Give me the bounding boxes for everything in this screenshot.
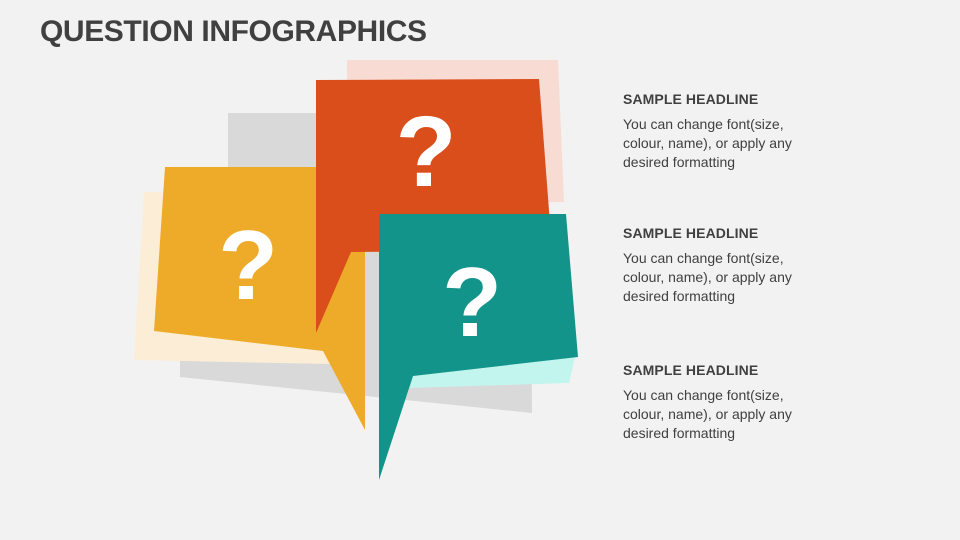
yellow bubble (154, 167, 365, 430)
orange bubble (316, 79, 552, 333)
text block 1: SAMPLE HEADLINE (623, 91, 758, 107)
text block 3: SAMPLE HEADLINE (623, 362, 758, 378)
text block 3: You can change font(size, (623, 387, 784, 403)
orange bubble: ? (395, 96, 457, 208)
title: QUESTION INFOGRAPHICS (40, 15, 427, 48)
text block 2: You can change font(size, (623, 250, 784, 266)
light cyan back shape (410, 357, 575, 388)
text block 2: desired formatting (623, 288, 735, 304)
text block 2: colour, name), or apply any (623, 269, 792, 285)
gray back shape (180, 113, 532, 413)
text block 3: colour, name), or apply any (623, 406, 792, 422)
teal bubble (379, 214, 578, 480)
yellow bubble: ? (218, 210, 278, 320)
text block 2 (623, 225, 792, 304)
text block 2: SAMPLE HEADLINE (623, 225, 758, 241)
text block 1: colour, name), or apply any (623, 135, 792, 151)
text block 3: desired formatting (623, 425, 735, 441)
text block 1: You can change font(size, (623, 116, 784, 132)
text block 3 (623, 362, 792, 441)
teal bubble: ? (442, 247, 502, 357)
cream back shape (134, 192, 330, 364)
light pink back shape (347, 60, 564, 205)
text block 1: desired formatting (623, 154, 735, 170)
text block 1 (623, 91, 792, 170)
